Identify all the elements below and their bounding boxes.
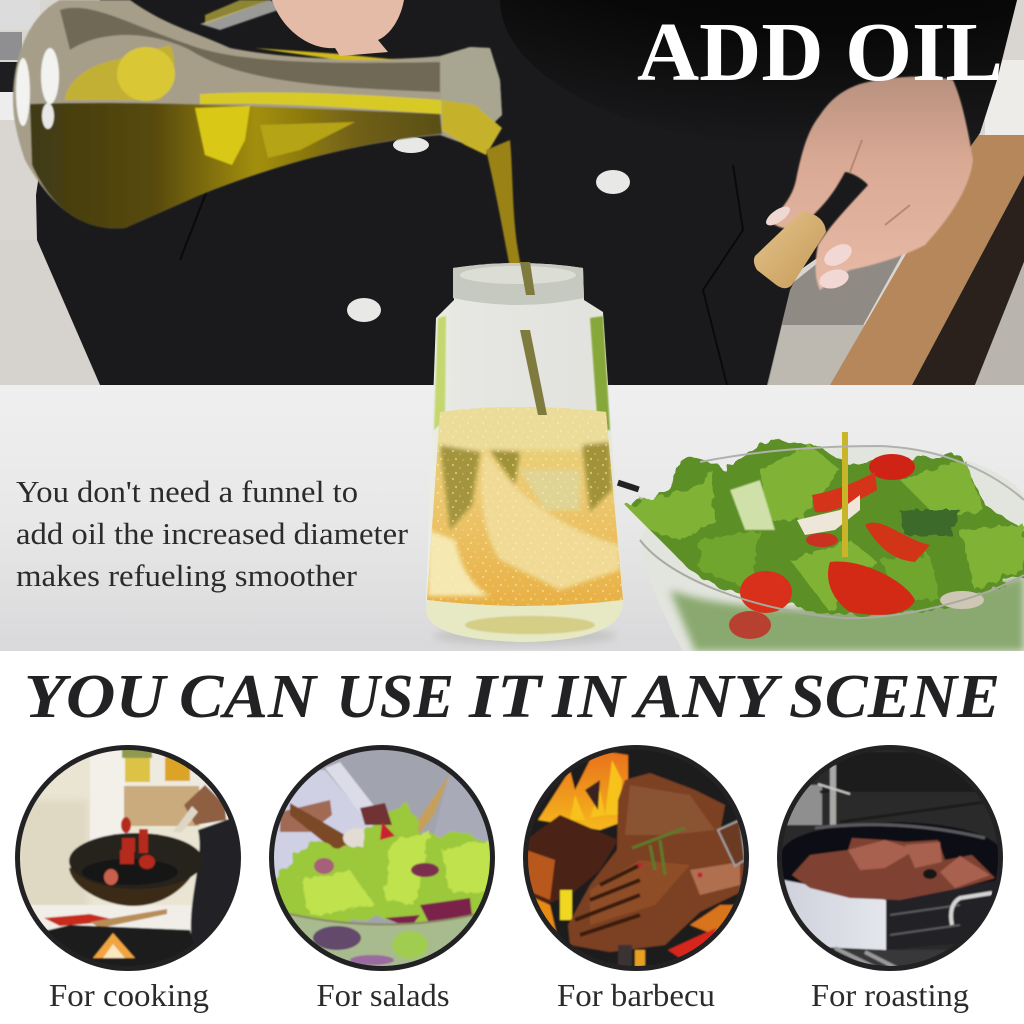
- oil drizzle: [842, 432, 848, 557]
- heading: you can use it in any scene: ANY: [630, 663, 783, 731]
- heading: you can use it in any scene: IN: [551, 663, 627, 731]
- panel: hero photo of oil being poured: [0, 0, 1024, 651]
- description text: makes refueling smoother: [16, 558, 358, 593]
- chef jacket: [36, 0, 1024, 385]
- lettuce through glass: [670, 575, 1024, 651]
- heading: you can use it in any scene: [24, 663, 1000, 731]
- heading: you can use it in any scene: USE: [336, 663, 454, 731]
- cork stopper: [754, 211, 826, 288]
- panel: for roasting: [778, 746, 1002, 1013]
- description text: You don't need a funnel to: [16, 474, 358, 509]
- fingernails: [766, 206, 852, 288]
- description text: [16, 474, 409, 593]
- chicken pieces: [797, 495, 860, 535]
- glass pitcher with oil: [13, 0, 502, 228]
- heading: you can use it in any scene: CAN: [179, 663, 318, 731]
- hand holding pitcher: [272, 0, 404, 56]
- glass jar with oil: [425, 262, 625, 645]
- wooden board: [830, 135, 1024, 385]
- label: For salads: [316, 977, 450, 1013]
- kitchen background: [0, 0, 1024, 390]
- heading: you can use it in any scene: SCENE: [789, 663, 1000, 731]
- counter: [0, 385, 1024, 651]
- panel: for barbecue: [524, 746, 748, 1013]
- label: For roasting: [811, 977, 969, 1013]
- title: ADD OIL: ADD OIL: [637, 6, 1003, 99]
- jacket buttons: [347, 137, 630, 322]
- oil refraction shapes: [425, 400, 625, 605]
- label: For barbecu: [557, 977, 715, 1013]
- panel: for salads: [270, 746, 494, 1013]
- description text: add oil the increased diameter: [16, 516, 409, 551]
- heading: you can use it in any scene: YOU: [24, 663, 169, 731]
- tomatoes: [729, 454, 930, 639]
- label: For cooking: [49, 977, 209, 1013]
- oil stream: [486, 140, 521, 263]
- hand holding stopper: [754, 77, 973, 292]
- lettuce mass: [625, 440, 1024, 615]
- panel: for cooking: [16, 746, 240, 1013]
- salad bowl: [617, 432, 1024, 651]
- oil stream inside jar: [520, 262, 547, 415]
- heading: you can use it in any scene: IT: [468, 663, 543, 731]
